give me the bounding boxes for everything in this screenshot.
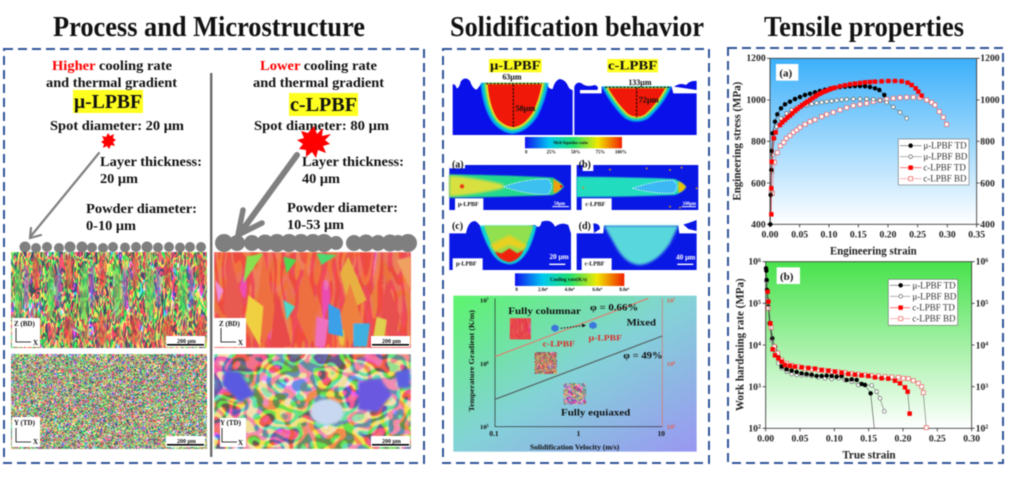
axis ticks and labels: 600 [751,178,766,189]
axis labels: Solidification Velocity (m/s) [530,443,620,451]
grain inset: columnar [510,318,531,339]
axis ticks and labels: 0.30 [963,433,980,444]
parameters: conventional LPBF [254,118,404,232]
arrow: from c-LPBF to micro LPBF [561,324,586,328]
melt pool contour: micro LPBF: 63μm [502,73,522,82]
parameters: conventional LPBF: 40 μm [302,171,341,186]
colorbar: melt liquidus ratio: Melt liquidus ratio [553,140,588,145]
right axis [661,298,663,427]
axis ticks and labels: 400 [751,220,766,231]
parameters: micro LPBF: Layer thickness: [100,154,202,169]
legend: c-LPBF BD [923,174,967,184]
parameters: conventional LPBF: Powder diameter: [287,200,398,215]
colorbar: melt liquidus ratio: 100% [615,150,627,155]
column heading: micro LPBF: Higher cooling rate [52,58,172,73]
colorbar: melt liquidus ratio: 75% [596,150,605,155]
EBSD map: micro LPBF build direction: 200 μm [177,339,196,345]
axis ticks and labels: 10 [976,257,985,268]
series: c-LPBF BD [772,97,947,193]
chart (b): work hardening rate vs true strain [735,257,988,461]
colorbar: cooling rate: 8.0e⁶ [619,287,630,293]
melt pool contour: conventional LPBF: 72μm [639,95,659,104]
EBSD map: conventional LPBF build direction: 200 μm [382,339,401,345]
EBSD map: conventional LPBF transverse direction: X [238,439,243,447]
legend [898,139,969,185]
axis ticks and labels: 5 [758,300,761,306]
axis ticks and labels: 0.05 [791,230,808,241]
melt pool contour: conventional LPBF [574,78,697,135]
axis ticks and labels: 0.15 [860,433,877,444]
melt pool contour: micro LPBF: 58μm [515,104,535,113]
series: c-LPBF BD [768,308,926,428]
divider between processes [210,73,212,457]
axis ticks and labels: Engineering strain [830,245,917,257]
boundary line: columnar to mixed [495,298,648,357]
EBSD map: micro LPBF transverse direction: X [33,438,38,446]
axis ticks and labels: 6 [758,258,761,264]
EBSD map: conventional LPBF build direction: Z (BD) [219,320,240,328]
series: micro LPBF TD [770,86,884,224]
parameters: conventional LPBF: Layer thickness: [302,154,404,169]
region labels: c-LPBF [543,340,575,349]
parameters: micro LPBF: Spot diameter: 20 μm [50,118,185,133]
panel: solidification behavior [443,49,709,463]
powder bed: fine powder [20,242,206,253]
axis labels: Temperature Gradient (K/m) [468,309,476,412]
colorbar: melt liquidus ratio: 25% [547,150,556,155]
panel: process and microstructure [4,49,424,463]
series: micro LPBF TD [766,268,874,428]
EBSD map: conventional LPBF build direction: X [238,339,243,347]
axis ticks and labels: 4 [985,342,988,348]
axis ticks and labels: 0.00 [757,433,774,444]
cooling rate section [449,158,698,293]
axis ticks and labels: 1000 [980,95,1000,106]
EBSD map: micro LPBF build direction [11,252,207,348]
axis ticks and labels: 3 [758,383,761,389]
data point: c-LPBF [551,324,559,332]
region labels: Fully equiaxed [561,408,630,418]
colorbar: cooling rate: Cooling rate(K/s) [550,278,587,283]
legend: μ-LPBF BD [923,152,968,162]
arrow: thick laser beam [238,155,297,235]
series: c-LPBF TD [768,292,910,414]
EBSD map: micro LPBF build direction: X [33,339,38,347]
axis ticks and labels: 2 [985,425,988,431]
cooling map (b): conventional LPBF top view: c-LPBF [585,202,606,208]
title: Tensile properties: Tensile properties [764,12,964,43]
axis labels: 10⁵ [667,424,675,431]
legend: μ-LPBF TD [923,141,967,151]
EBSD map: conventional LPBF transverse direction: 200 μm [382,439,401,445]
axis labels: 10⁶ [667,361,675,368]
region labels: φ = 49% [623,351,663,361]
cooling map (c): micro LPBF cross section [449,221,571,270]
axis labels: 10⁷ [480,297,489,304]
solidification map [453,296,697,452]
axis ticks and labels: 3 [985,383,988,389]
axis labels: 10⁷ [667,297,675,304]
column heading: conventional LPBF: Lower cooling rate [260,58,377,73]
melt pool contour: micro LPBF [453,73,573,135]
column heading: conventional LPBF: and thermal gradient [253,75,385,90]
axis ticks and labels: 1200 [980,53,1000,64]
series: c-LPBF TD [771,81,922,214]
axis labels [468,297,675,451]
axis ticks and labels: 0.25 [909,230,926,241]
cooling map (c): micro LPBF cross section: 20 μm [549,252,569,261]
grain inset: equiaxed [564,383,586,404]
cooling map (b): conventional LPBF top view [577,158,698,210]
axis ticks and labels: 10 [748,299,758,310]
title: Solidification behavior: Solidification behavior [450,12,704,43]
axis ticks and labels: 1000 [746,95,766,106]
axis ticks and labels: 0.05 [792,433,809,444]
axis ticks and labels: 0.00 [762,230,779,241]
label: micro LPBF: μ-LPBF [490,59,541,73]
legend: c-LPBF TD [912,303,955,313]
label: conventional LPBF: c-LPBF [608,59,658,73]
axis ticks and labels [735,257,988,461]
cooling map (a): micro LPBF top view [449,158,571,210]
axis ticks and labels: 0.10 [821,230,838,241]
legend [888,279,958,325]
column heading: conventional LPBF [253,58,385,116]
EBSD map: micro LPBF build direction: Z (BD) [14,320,35,328]
axis ticks and labels: 400 [980,220,995,231]
data point: micro LPBF [589,322,597,329]
cooling map (b): conventional LPBF top view: 100μm [683,202,696,207]
axis labels: 10⁶ [480,361,489,368]
region labels [508,303,663,418]
icon: large laser spot [297,126,331,158]
column heading: micro LPBF: μ-LPBF [74,91,142,113]
axis ticks and labels: 5 [985,300,988,306]
axis ticks and labels: 10 [748,382,758,393]
label (b) [777,267,800,284]
plot axes [495,298,662,427]
legend: μ-LPBF BD [912,291,957,301]
legend: c-LPBF TD [923,163,966,173]
colorbar: cooling rate: 2.0e⁶ [538,287,548,293]
region labels: Fully columnar [508,306,581,316]
axis ticks and labels: 10 [748,257,758,268]
icon: small laser spot [101,133,116,149]
series: micro LPBF BD [767,282,884,411]
axis ticks and labels: True strain [842,449,896,461]
colorbar: cooling rate [515,273,630,293]
cooling map (c): micro LPBF cross section: (c) [452,221,463,232]
axis ticks and labels: 0.10 [826,433,843,444]
axes frame [767,58,980,227]
cooling map (d): conventional LPBF cross section: c-LPBF [585,262,605,268]
EBSD map: conventional LPBF transverse direction [214,354,411,449]
axis ticks and labels: 4 [758,342,761,348]
axis labels: 10 [658,429,665,438]
region labels: μ-LPBF [589,333,622,342]
label (b): (b) [780,271,794,283]
column heading: conventional LPBF: c-LPBF [290,94,357,116]
parameters: conventional LPBF: 10-53 μm [287,217,345,232]
axis ticks and labels: 10 [976,299,985,310]
axis ticks and labels: 0.15 [850,230,867,241]
colorbar: melt liquidus ratio [525,137,627,155]
cooling map (a): micro LPBF top view: μ-LPBF [458,202,479,208]
series: micro LPBF BD [771,99,907,192]
axis ticks and labels: 10 [976,340,985,351]
grain inset: mixed [535,352,557,374]
powder bed: coarse powder [215,234,417,252]
axis ticks and labels: 6 [985,258,988,264]
axis ticks and labels: 0.35 [968,230,985,241]
column heading: micro LPBF [46,58,178,113]
parameters: micro LPBF: Powder diameter: [86,201,197,216]
colorbar: cooling rate: 0 [515,288,518,293]
EBSD map: micro LPBF transverse direction [11,354,207,449]
EBSD map: conventional LPBF build direction [214,252,411,348]
EBSD map: micro LPBF transverse direction: Y (TD) [14,419,36,427]
EBSD map: conventional LPBF transverse direction: Y (TD) [220,419,242,427]
axis ticks and labels: 2 [758,425,761,431]
axis ticks and labels: 0.20 [880,230,897,241]
parameters: micro LPBF [50,118,202,233]
cooling map (a): micro LPBF top view: 50μm [554,202,565,207]
axis labels: 1 [577,429,581,438]
region labels: φ = 0.66% [590,303,638,313]
axis ticks and labels: Work hardening rate (MPa) [735,278,747,411]
cooling map (d): conventional LPBF cross section: 40 μm [676,253,695,262]
axes frame [763,262,975,431]
cooling map (b): conventional LPBF top view: (b) [579,159,591,170]
parameters: conventional LPBF: Spot diameter: 80 μm [254,118,390,133]
colorbar: cooling rate: 6.0e⁶ [592,287,603,293]
axis ticks and labels: 0.20 [895,433,912,444]
axis ticks and labels: 10 [748,340,758,351]
axis ticks and labels: 10 [976,423,985,434]
panel: tensile properties [728,48,1003,463]
region labels: Mixed [627,317,656,327]
axis ticks and labels: 0.30 [939,230,956,241]
axis labels: 10⁵ [480,424,489,431]
axis ticks and labels: 1200 [746,53,766,64]
chart (a): engineering stress vs strain [732,53,1000,257]
parameters: micro LPBF: 0-10 μm [86,218,137,233]
axis ticks and labels: 10 [748,423,758,434]
legend: μ-LPBF TD [912,280,956,290]
label (a) [776,64,798,81]
axis ticks and labels: 800 [751,136,766,147]
colorbar: melt liquidus ratio: 0 [525,150,528,155]
axis ticks and labels: 600 [980,178,995,189]
axis labels: 0.1 [489,429,499,438]
axis ticks and labels: Engineering stress (MPa) [732,81,744,201]
column heading: micro LPBF: and thermal gradient [46,75,178,90]
axis ticks and labels: 800 [980,136,995,147]
cooling map (d): conventional LPBF cross section [577,220,697,270]
colorbar: cooling rate: 4.0e⁶ [565,287,575,293]
colorbar: melt liquidus ratio: 50% [571,150,581,155]
label (a): (a) [779,68,792,80]
legend: c-LPBF BD [912,314,956,324]
parameters: micro LPBF: 20 μm [100,171,139,186]
boundary line: mixed to equiaxed [495,336,662,399]
axis ticks and labels [732,53,1000,257]
cooling map (a): micro LPBF top view: (a) [452,159,464,170]
title: Process and Microstructure: Process and Microstructure [53,12,365,43]
melt pool section [453,59,697,155]
axis ticks and labels: 0.25 [929,433,946,444]
cooling map (d): conventional LPBF cross section: (d) [579,221,591,232]
EBSD map: micro LPBF transverse direction: 200 μm [177,439,196,445]
melt pool contour: conventional LPBF: 133μm [628,78,652,87]
arrow: thin laser beam [30,153,99,238]
axis ticks and labels: 10 [976,382,985,393]
cooling map (c): micro LPBF cross section: μ-LPBF [456,262,477,268]
